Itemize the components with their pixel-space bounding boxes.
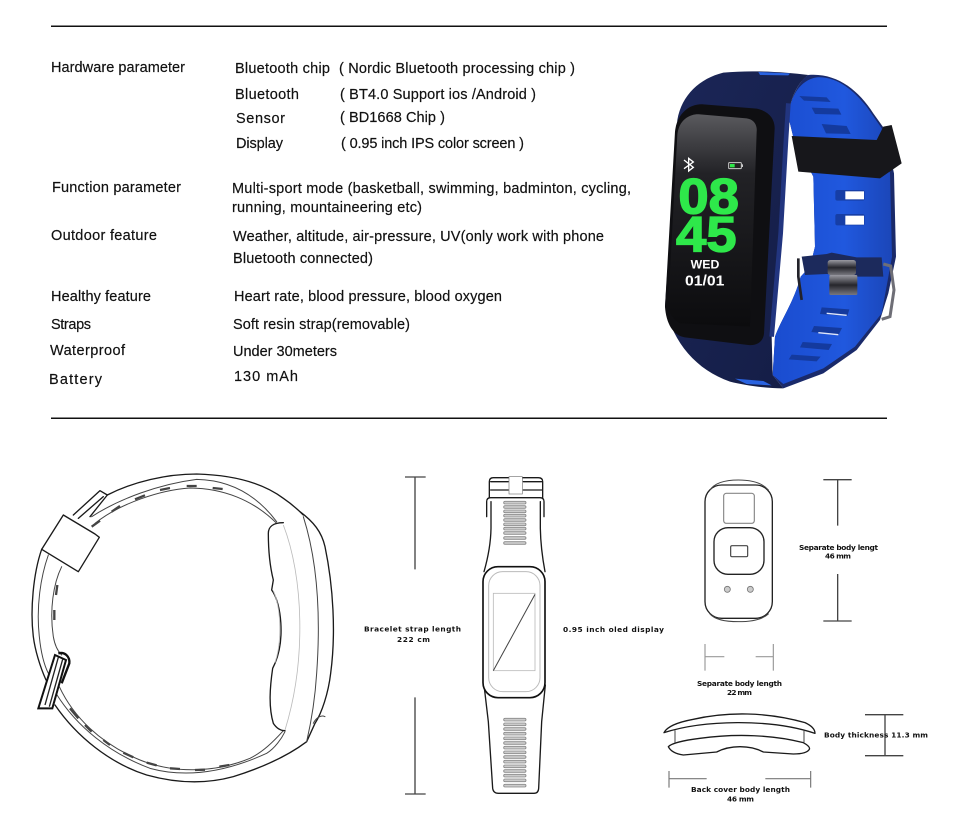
black screen bezel	[665, 104, 775, 345]
face edge lines	[303, 517, 325, 742]
display area	[493, 593, 535, 671]
label: bracelet strap length	[364, 624, 461, 644]
label: separate body length 46: 46 mm	[825, 552, 851, 560]
icon: bluetooth	[684, 158, 693, 171]
blue strap	[773, 77, 892, 384]
label: back cover body length	[691, 785, 790, 804]
label: bracelet strap length: Bracelet strap length	[364, 624, 461, 634]
screen bezel	[489, 572, 540, 692]
row: hardware parameter: Sensor	[236, 111, 285, 127]
label: body thickness: Body thickness 11.3 mm	[824, 730, 928, 740]
accent: top and bottom blue	[735, 72, 790, 385]
row: straps	[51, 317, 410, 333]
label: oled display: 0.95 inch oled display	[563, 625, 664, 634]
top divider	[51, 26, 887, 27]
illustration: smart band product photo: 45	[676, 207, 737, 263]
clock digits: 08	[678, 168, 739, 224]
watch body	[483, 567, 545, 698]
buckle pin	[38, 653, 69, 708]
row: function parameter: running, mountaineering etc)	[232, 200, 422, 216]
strap tip	[73, 491, 107, 518]
buckle	[487, 477, 544, 517]
diagram: front view of band	[405, 477, 545, 794]
row: function parameter: Multi-sport mode (basketball, swimming, badminton, cycling,	[232, 181, 631, 197]
back cover dimension line	[669, 771, 811, 788]
illustration: smart band product photo	[665, 71, 902, 388]
label: back cover body length: Back cover body length	[691, 785, 790, 794]
row: battery: 130 mAh	[234, 369, 298, 385]
row: outdoor feature: Outdoor feature	[51, 228, 157, 244]
body width dimension line	[705, 644, 773, 671]
navy watch body	[665, 71, 808, 388]
row: hardware parameter: ( 0.95 inch IPS color screen )	[341, 136, 524, 152]
row: healthy feature	[51, 289, 502, 305]
row: function parameter	[52, 180, 631, 216]
glossy screen	[668, 114, 757, 327]
row: outdoor feature: Bluetooth connected)	[233, 251, 373, 267]
row: function parameter: Function parameter	[52, 180, 181, 196]
diagram: back, top and side views of module	[664, 480, 903, 788]
label: back cover body length: 46 mm	[727, 794, 754, 804]
body back and sensor	[268, 523, 285, 731]
lower strap holes	[504, 718, 526, 787]
module side view	[664, 714, 815, 755]
strap inner lines	[38, 479, 285, 773]
body length dimension line	[823, 480, 852, 621]
black strap loop	[792, 125, 902, 178]
row: straps: Straps	[51, 317, 91, 333]
strap outline	[484, 502, 545, 793]
label: bracelet strap length: 222 cm	[397, 635, 430, 644]
row: hardware parameter: Bluetooth	[235, 87, 299, 103]
label: separate body length 22: 22 mm	[727, 688, 752, 697]
panel: specification table	[49, 60, 631, 388]
label: separate body length 46	[799, 543, 878, 560]
row: waterproof: Waterproof	[50, 343, 126, 359]
thickness dimension line	[865, 715, 903, 756]
strap outer edge	[773, 75, 896, 388]
row: outdoor feature: Weather, altitude, air-pressure, UV(only work with phone	[233, 229, 604, 245]
row: healthy feature: Heart rate, blood pressure, blood oxygen	[234, 289, 502, 305]
row: hardware parameter: Display	[236, 136, 284, 152]
row: waterproof	[50, 343, 337, 360]
row: hardware parameter: ( Nordic Bluetooth processing chip )	[339, 61, 575, 77]
row: straps: Soft resin strap(removable)	[233, 317, 410, 333]
label: separate body length 46: Separate body lengt	[799, 543, 878, 552]
outer ring outline	[32, 474, 333, 782]
module back view	[705, 480, 772, 622]
bottom divider	[51, 418, 887, 419]
strap grey slots	[54, 486, 223, 620]
strap slots	[789, 96, 865, 361]
row: waterproof: Under 30meters	[233, 344, 337, 360]
row: hardware parameter: ( BT4.0 Support ios /Android )	[340, 87, 536, 103]
row: healthy feature: Healthy feature	[51, 289, 151, 305]
label: separate body length 22: Separate body length	[697, 679, 782, 688]
date label: 01/01	[685, 272, 724, 289]
strap length dimension line	[405, 477, 426, 794]
row: battery: Battery	[49, 372, 103, 388]
row: outdoor feature	[51, 228, 604, 267]
row: hardware parameter	[51, 60, 575, 152]
row: hardware parameter: Bluetooth chip	[235, 61, 330, 77]
body faint curves	[273, 525, 300, 730]
row: battery	[49, 369, 298, 388]
upper strap holes	[504, 501, 526, 544]
row: hardware parameter: Hardware parameter	[51, 60, 185, 76]
day label: WED	[691, 258, 719, 271]
strap lower slots	[70, 708, 229, 770]
row: hardware parameter: ( BD1668 Chip )	[340, 110, 445, 126]
icon: battery	[729, 163, 743, 169]
label: separate body length 22	[697, 679, 782, 697]
buckle	[798, 253, 894, 319]
body side highlight	[772, 103, 788, 337]
strap clip	[42, 515, 99, 572]
diagram: side view of band	[32, 474, 333, 782]
